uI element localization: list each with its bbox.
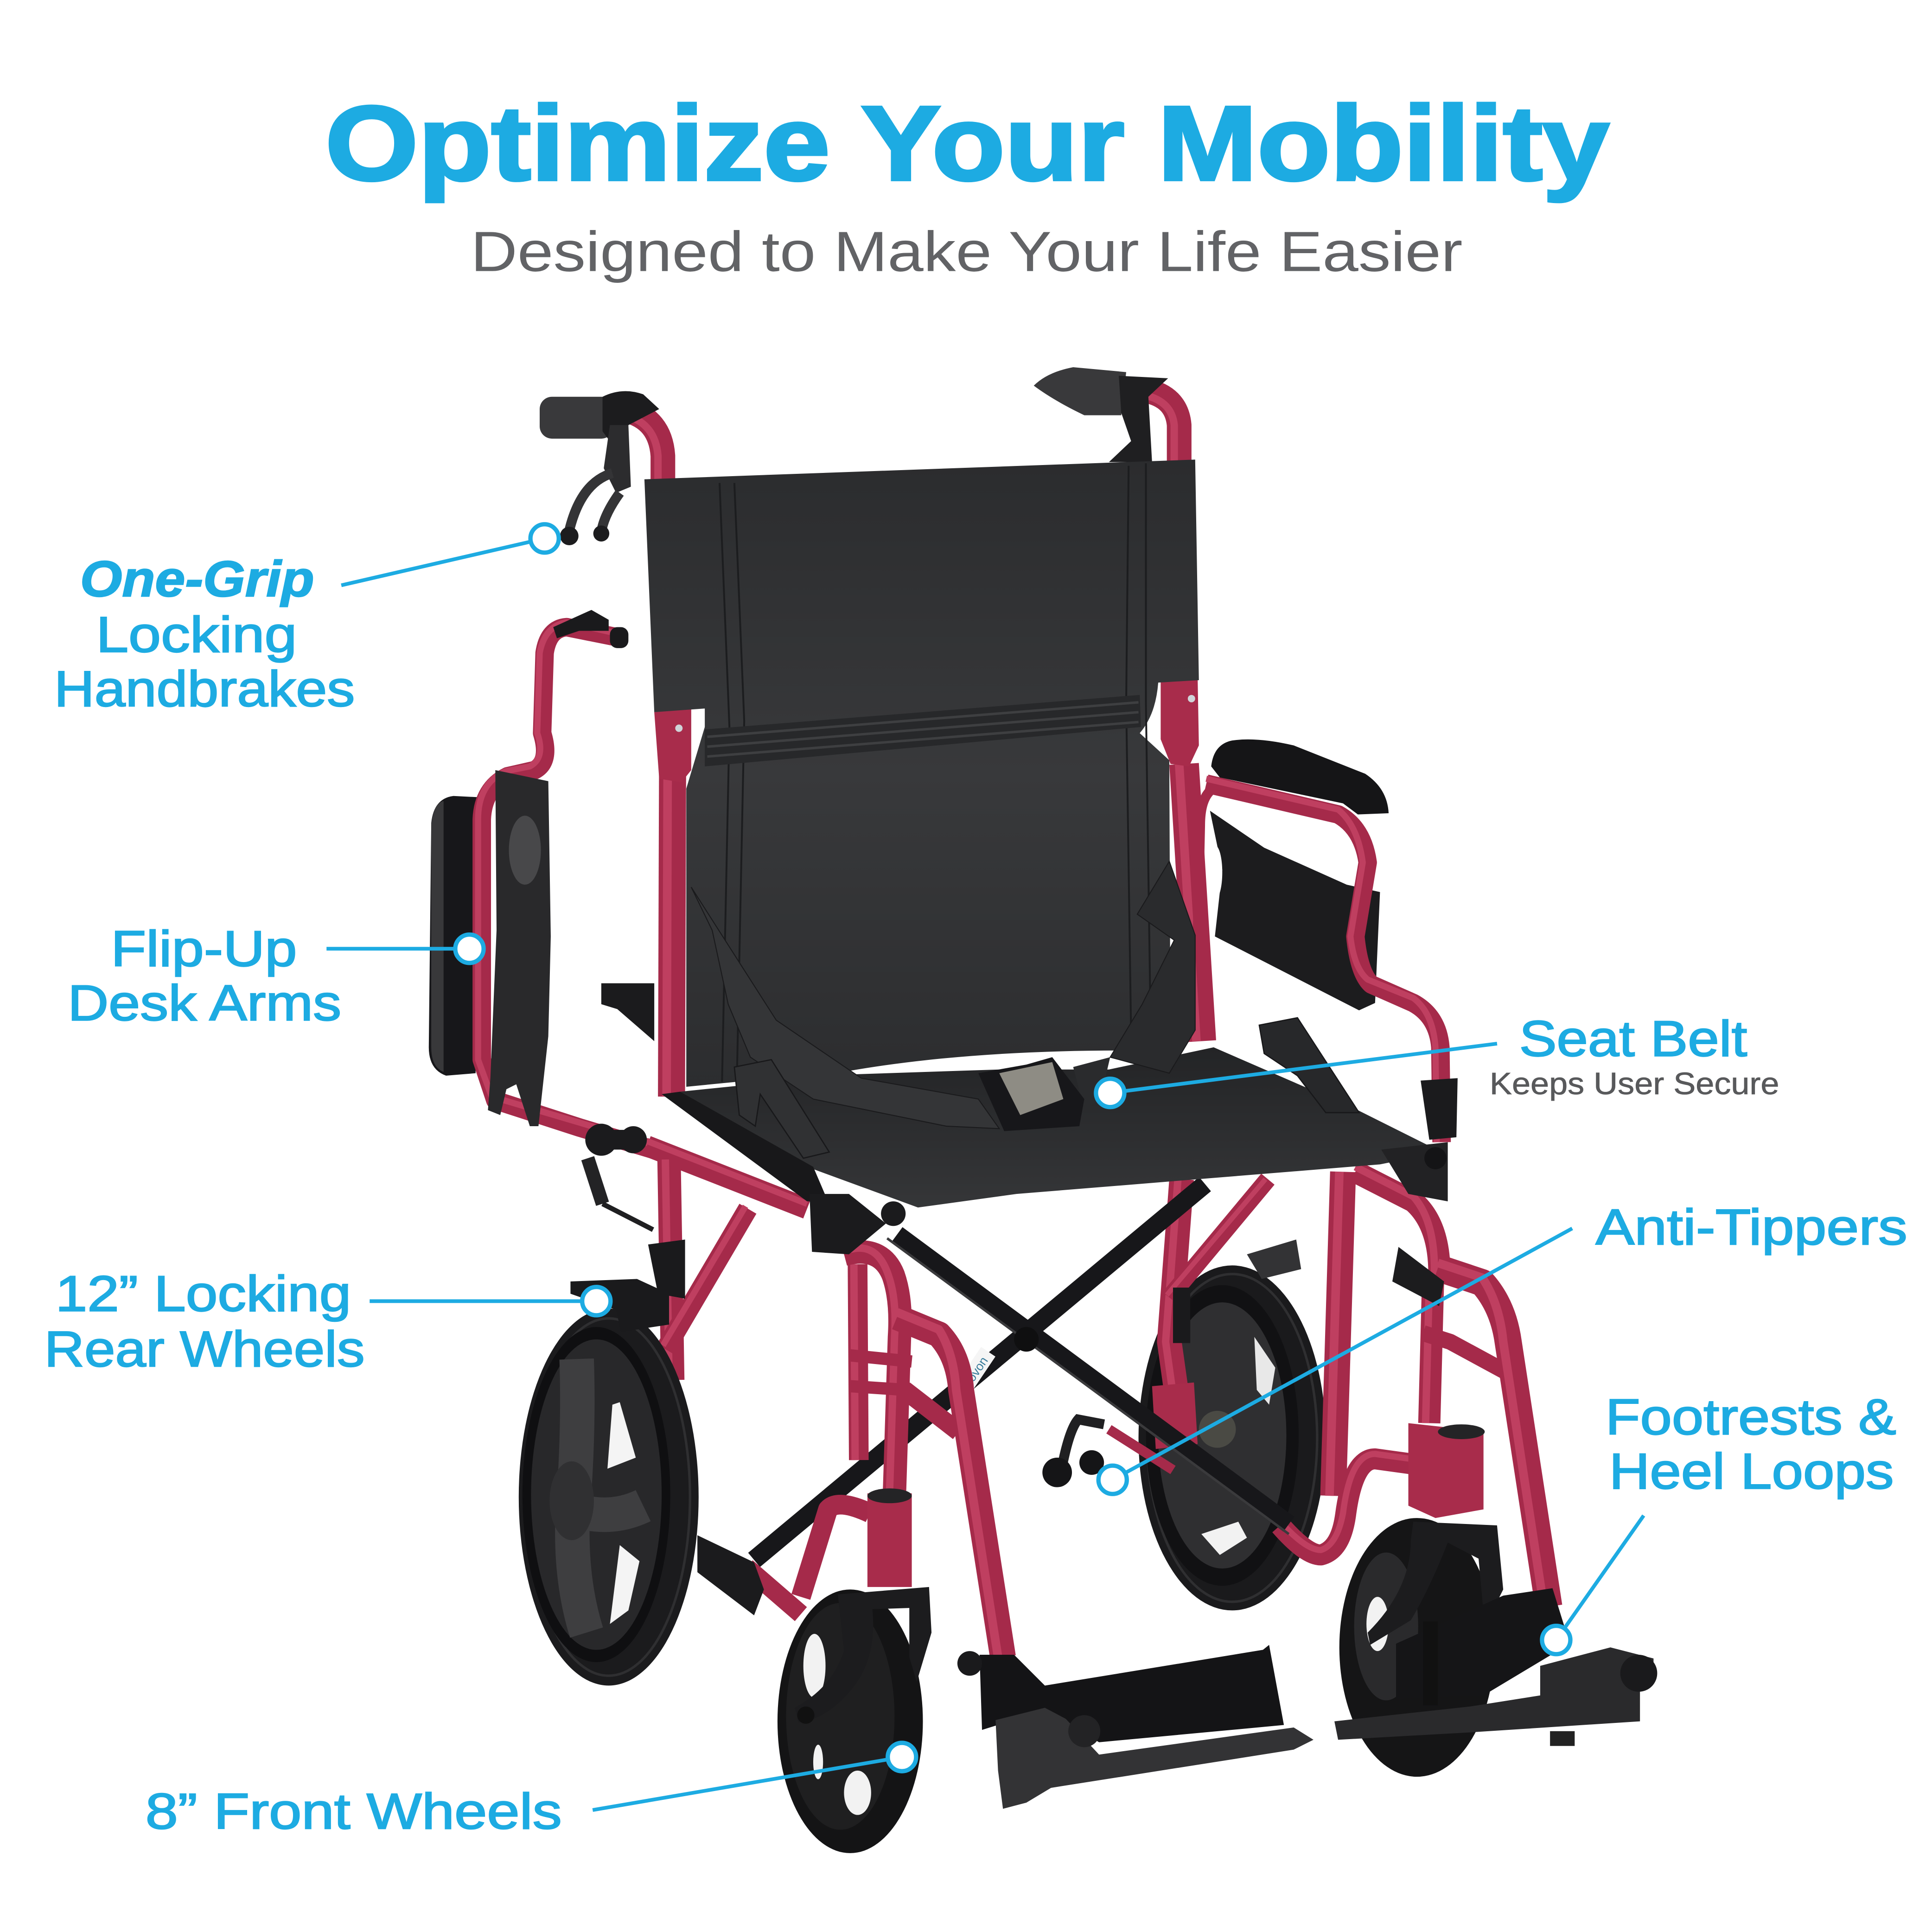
seat belt straps [691,861,1195,1129]
callout: rear wheels: 12” Locking [56,1266,351,1322]
right armrest [1198,740,1458,1142]
arm pad [1211,740,1389,815]
arm top bracket [553,610,609,638]
novon label: novon [960,1354,991,1390]
right grip [1034,367,1168,462]
arm tube [482,627,653,1149]
callout: anti-tippers [1098,1199,1907,1494]
callout: desk arms: Desk Arms [68,975,341,1031]
callout: footrests [1542,1389,1896,1654]
callout: footrests: Heel Loops [1609,1443,1894,1499]
right front frame and hanger [1280,1167,1549,1607]
arm side panel [1210,811,1380,1010]
callout: seat belt [1096,1010,1779,1107]
callout: desk arms: Flip-Up [111,921,297,977]
arm tube [1206,784,1441,1142]
seat belt buckle [978,1057,1110,1131]
callout: front wheels [146,1743,916,1840]
callout: rear wheels [45,1266,611,1377]
left backrest sleeve [654,708,691,783]
rear left wheel [519,1308,699,1685]
left flip-up desk arm [429,610,653,1149]
arm clamp [1421,1078,1458,1140]
callout: front wheels: 8” Front Wheels [146,1783,562,1840]
front right caster wheel [1339,1518,1503,1777]
subtitle: Designed to Make Your Life Easier [471,220,1462,283]
front left caster wheel [778,1587,931,1853]
seat corner block [810,1194,886,1254]
callout: handbrakes [54,524,559,717]
rear right wheel [1139,1239,1326,1610]
seat sling [662,1047,1448,1207]
callout: anti-tippers: Anti-Tippers [1595,1199,1907,1256]
callout: desk arms [68,921,484,1031]
rear left frame [601,983,807,1614]
rear wheel lock [570,1124,685,1332]
novon label [956,1347,995,1393]
seat side loops [734,1018,1359,1158]
callout: rear wheels: Rear Wheels [45,1321,365,1377]
lower left cross bracket [697,1535,764,1615]
mesh arm panel [488,770,551,1126]
callout: footrests: Footrests & [1606,1389,1896,1445]
back tubes and push handles [626,390,1201,1097]
wheelchair product illustration [429,367,1657,1853]
callout: seat belt: Seat Belt [1519,1010,1747,1067]
folding cross brace [754,1184,1205,1560]
left front frame [801,1194,1289,1657]
right backrest sleeve [1160,678,1199,766]
arm pad [429,796,478,1076]
callout: handbrakes: Locking [96,606,297,663]
left front footrest [957,1645,1314,1809]
anti-tippers [1042,1419,1173,1487]
callout: handbrakes: Handbrakes [54,661,355,717]
callout: seat belt: Keeps User Secure [1490,1067,1779,1101]
callout: handbrakes: One-Grip [80,551,314,607]
title: Optimize Your Mobility [325,84,1609,203]
caster fork [795,1587,931,1722]
left handbrake and grip [540,391,659,545]
backrest upholstery [644,459,1199,1087]
right footrest and heel loop [1334,1588,1657,1746]
right side rear frame [1152,1179,1268,1449]
